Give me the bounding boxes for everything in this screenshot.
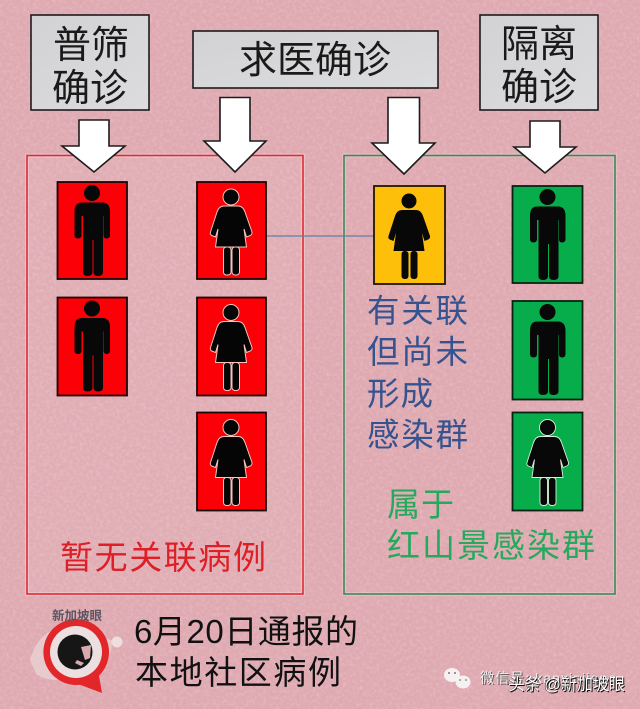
logo pupil [58,634,92,670]
heading box: 隔离确诊: 确诊 [501,67,577,109]
tile: green male 1 [512,186,582,283]
logo highlight [81,645,91,660]
title [134,613,358,691]
tile: red female 1 [197,182,266,279]
heading box: 普筛确诊: 普筛 [53,25,129,67]
text: belongs to Redhill cluster: 属于 [387,486,454,523]
text: linked but no cluster yet: 但尚未 [367,334,468,370]
watermark: toutiao: 头条 @新加坡眼 [509,676,626,695]
connector line [266,235,374,237]
heading box: 求医确诊: 求医确诊 [239,40,391,82]
logo ring and tail [43,619,109,693]
text: linked but no cluster yet: 感染群 [367,417,468,453]
logo ring inner fill [49,625,103,679]
watermark: wechat id: 微信号: kanxinjiapo [480,670,616,686]
title: 本地社区病例 [135,654,341,691]
text: belongs to Redhill cluster [387,486,595,564]
watermark: toutiao: 头条 @新加坡眼 [508,675,624,694]
text: belongs to Redhill cluster: 红山景感染群 [387,527,595,564]
heading box: 隔离确诊: 隔离 [501,24,577,66]
tile: red female 3 [197,412,266,510]
tile: red female 2 [197,298,266,396]
heading box: 求医确诊 [193,31,438,88]
panel: green frame, cluster [344,156,615,594]
title: 6月20日通报的 [134,613,358,650]
text: linked but no cluster yet: 形成 [367,376,433,412]
text: linked but no cluster yet: 有关联 [367,293,468,329]
heading box: 普筛确诊: 确诊 [52,68,128,110]
heading box: 隔离确诊 [480,15,598,110]
logo highlight lower [75,660,84,666]
logo: Singapore Eye [30,608,122,693]
arrow: medical visit, right [372,98,435,174]
arrow: quarantine [514,121,576,173]
logo name: 新加坡眼 [52,608,102,623]
icon: wechat [444,668,470,688]
panel: red frame, no known link [27,156,303,594]
text: no known link cases: 暂无关联病例 [60,539,266,576]
watermark: toutiao: 头条 @新加坡眼 [508,675,625,694]
heading box: 普筛确诊 [31,15,149,110]
tile: green female [512,412,582,510]
logo wing [30,628,112,680]
tile: red male 1 [58,182,127,279]
text: linked but no cluster yet [367,293,468,453]
arrow: screening [62,120,125,172]
arrow: medical visit, left [204,98,266,172]
logo dot [112,636,122,648]
tile: red male 2 [58,298,127,396]
tile: yellow female [374,186,445,284]
tile: green male 2 [512,301,582,400]
watermark: wechat id: 微信号: kanxinjiapo [481,671,617,687]
